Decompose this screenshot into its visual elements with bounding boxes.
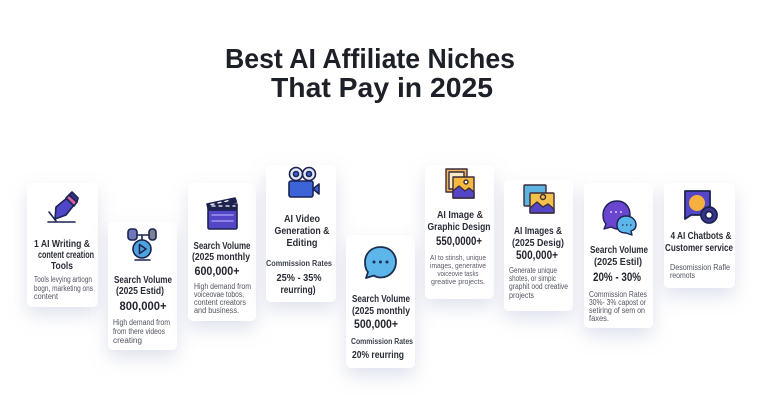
- description: AI to stinsh, unique: [430, 253, 486, 262]
- description: reomots: [670, 271, 695, 280]
- figure: 25% - 35% recurring: 25% - 35%: [276, 273, 322, 284]
- description: graphit ood creative: [509, 282, 568, 291]
- description: [113, 318, 170, 345]
- description: Commission Rates: [589, 290, 647, 299]
- icon: pen: [48, 192, 78, 222]
- figure: 600,000+: 600,000+: [194, 264, 240, 278]
- heading: Search Volume: [352, 294, 410, 305]
- figure: 550,0000+: 550,0000+: [436, 234, 482, 248]
- description: [670, 263, 730, 280]
- heading: AI Image &: [437, 210, 483, 221]
- heading: [274, 214, 330, 249]
- description: [34, 275, 93, 301]
- heading: [428, 210, 490, 233]
- description: [509, 266, 568, 300]
- heading: Search Volume: [114, 275, 172, 286]
- icon: two chat bubbles: [603, 201, 636, 235]
- panel: search volume 20% - 30%: [584, 183, 653, 328]
- description: Generate unique: [509, 266, 557, 275]
- panel: AI video generation and editing: [266, 165, 336, 302]
- heading: (2025 monthly: [192, 252, 250, 263]
- description: setiring of sem on: [589, 306, 645, 315]
- description: voiceovae tobos,: [194, 290, 244, 299]
- icon: video camera: [289, 168, 319, 197]
- title: That Pay in 2025: [271, 72, 493, 103]
- heading: (2025 monthly: [352, 306, 410, 317]
- description: [589, 290, 647, 323]
- heading: [352, 294, 410, 317]
- heading: Graphic Design: [428, 222, 490, 233]
- heading: Tools: [51, 261, 73, 272]
- heading: Search Volume: [590, 245, 648, 256]
- heading: (2025 Estid): [116, 286, 164, 297]
- heading: [590, 245, 648, 268]
- description: [430, 253, 486, 286]
- title: [225, 43, 515, 103]
- heading: AI Video: [284, 214, 320, 225]
- description: 30%- 3% capost or: [589, 298, 646, 307]
- heading: AI Images &: [514, 226, 562, 237]
- heading: Editing: [286, 238, 318, 249]
- label: commission rates: Commission Rates: [351, 336, 413, 346]
- heading: [512, 226, 564, 249]
- heading: [192, 241, 251, 263]
- description: and business.: [194, 306, 239, 315]
- description: images, generative: [430, 261, 486, 270]
- heading: [114, 275, 172, 297]
- description: content creators: [194, 298, 246, 307]
- heading: Generation &: [274, 226, 330, 237]
- description: bogn, marketing ons: [34, 284, 93, 293]
- title: Best AI Affiliate Niches: [225, 43, 515, 74]
- figure: 20% recurring: 20% reurring: [352, 350, 404, 361]
- heading: (2025 Desig): [512, 238, 564, 249]
- icon: chat bubble: [365, 247, 396, 278]
- description: Desomission Rafle: [670, 263, 730, 272]
- panel: search volume 800,000+: [108, 222, 177, 350]
- description: Tools levying artiogn: [34, 275, 92, 284]
- heading: content creation: [38, 250, 94, 261]
- figure: 500,000+: 500,000+: [354, 317, 398, 331]
- panel: AI chatbots and customer service: [664, 183, 735, 288]
- heading: 1 AI Writing &: [34, 239, 90, 250]
- figure: 20% - 30%: 20% - 30%: [593, 270, 641, 284]
- heading: 4 AI Chatbots &: [670, 231, 732, 242]
- heading: (2025 Estil): [594, 257, 642, 268]
- figure: 25% - 35% recurring: reurring): [280, 285, 316, 296]
- icon: picture cards: [524, 185, 554, 213]
- icon: clapperboard: [207, 198, 237, 229]
- description: from there videos: [113, 327, 165, 336]
- heading: Search Volume: [194, 241, 251, 252]
- figure: 25% - 35% recurring: [276, 273, 322, 296]
- description: voiceovie tasks: [438, 269, 479, 278]
- description: content: [34, 292, 59, 301]
- heading: [665, 231, 733, 254]
- panel: search volume 500,000+: [346, 235, 415, 368]
- panel: AI images and design: [504, 180, 573, 311]
- label: commission rates: Commission Rates: [266, 258, 332, 268]
- icon: chatbot bubble: [685, 191, 717, 223]
- description: projects: [509, 291, 534, 300]
- description: greative projects.: [431, 277, 485, 286]
- description: faxes.: [589, 314, 609, 323]
- description: creating: [113, 336, 142, 345]
- panel: AI writing and content creation tools: [27, 183, 98, 307]
- figure: 800,000+: 800,000+: [120, 299, 166, 313]
- description: High demand from: [113, 318, 170, 327]
- panel: search volume 600,000+: [188, 183, 256, 321]
- panel: AI image and graphic design: [425, 165, 494, 299]
- figure: 500,000+: 500,000+: [516, 248, 558, 262]
- heading: [34, 239, 94, 272]
- description: shotes, or simpic: [509, 274, 556, 283]
- description: [194, 282, 251, 315]
- heading: Customer service: [665, 243, 733, 254]
- icon: barbell with play button: [128, 229, 156, 260]
- description: High demand from: [194, 282, 251, 291]
- icon: image frames: [446, 169, 474, 198]
